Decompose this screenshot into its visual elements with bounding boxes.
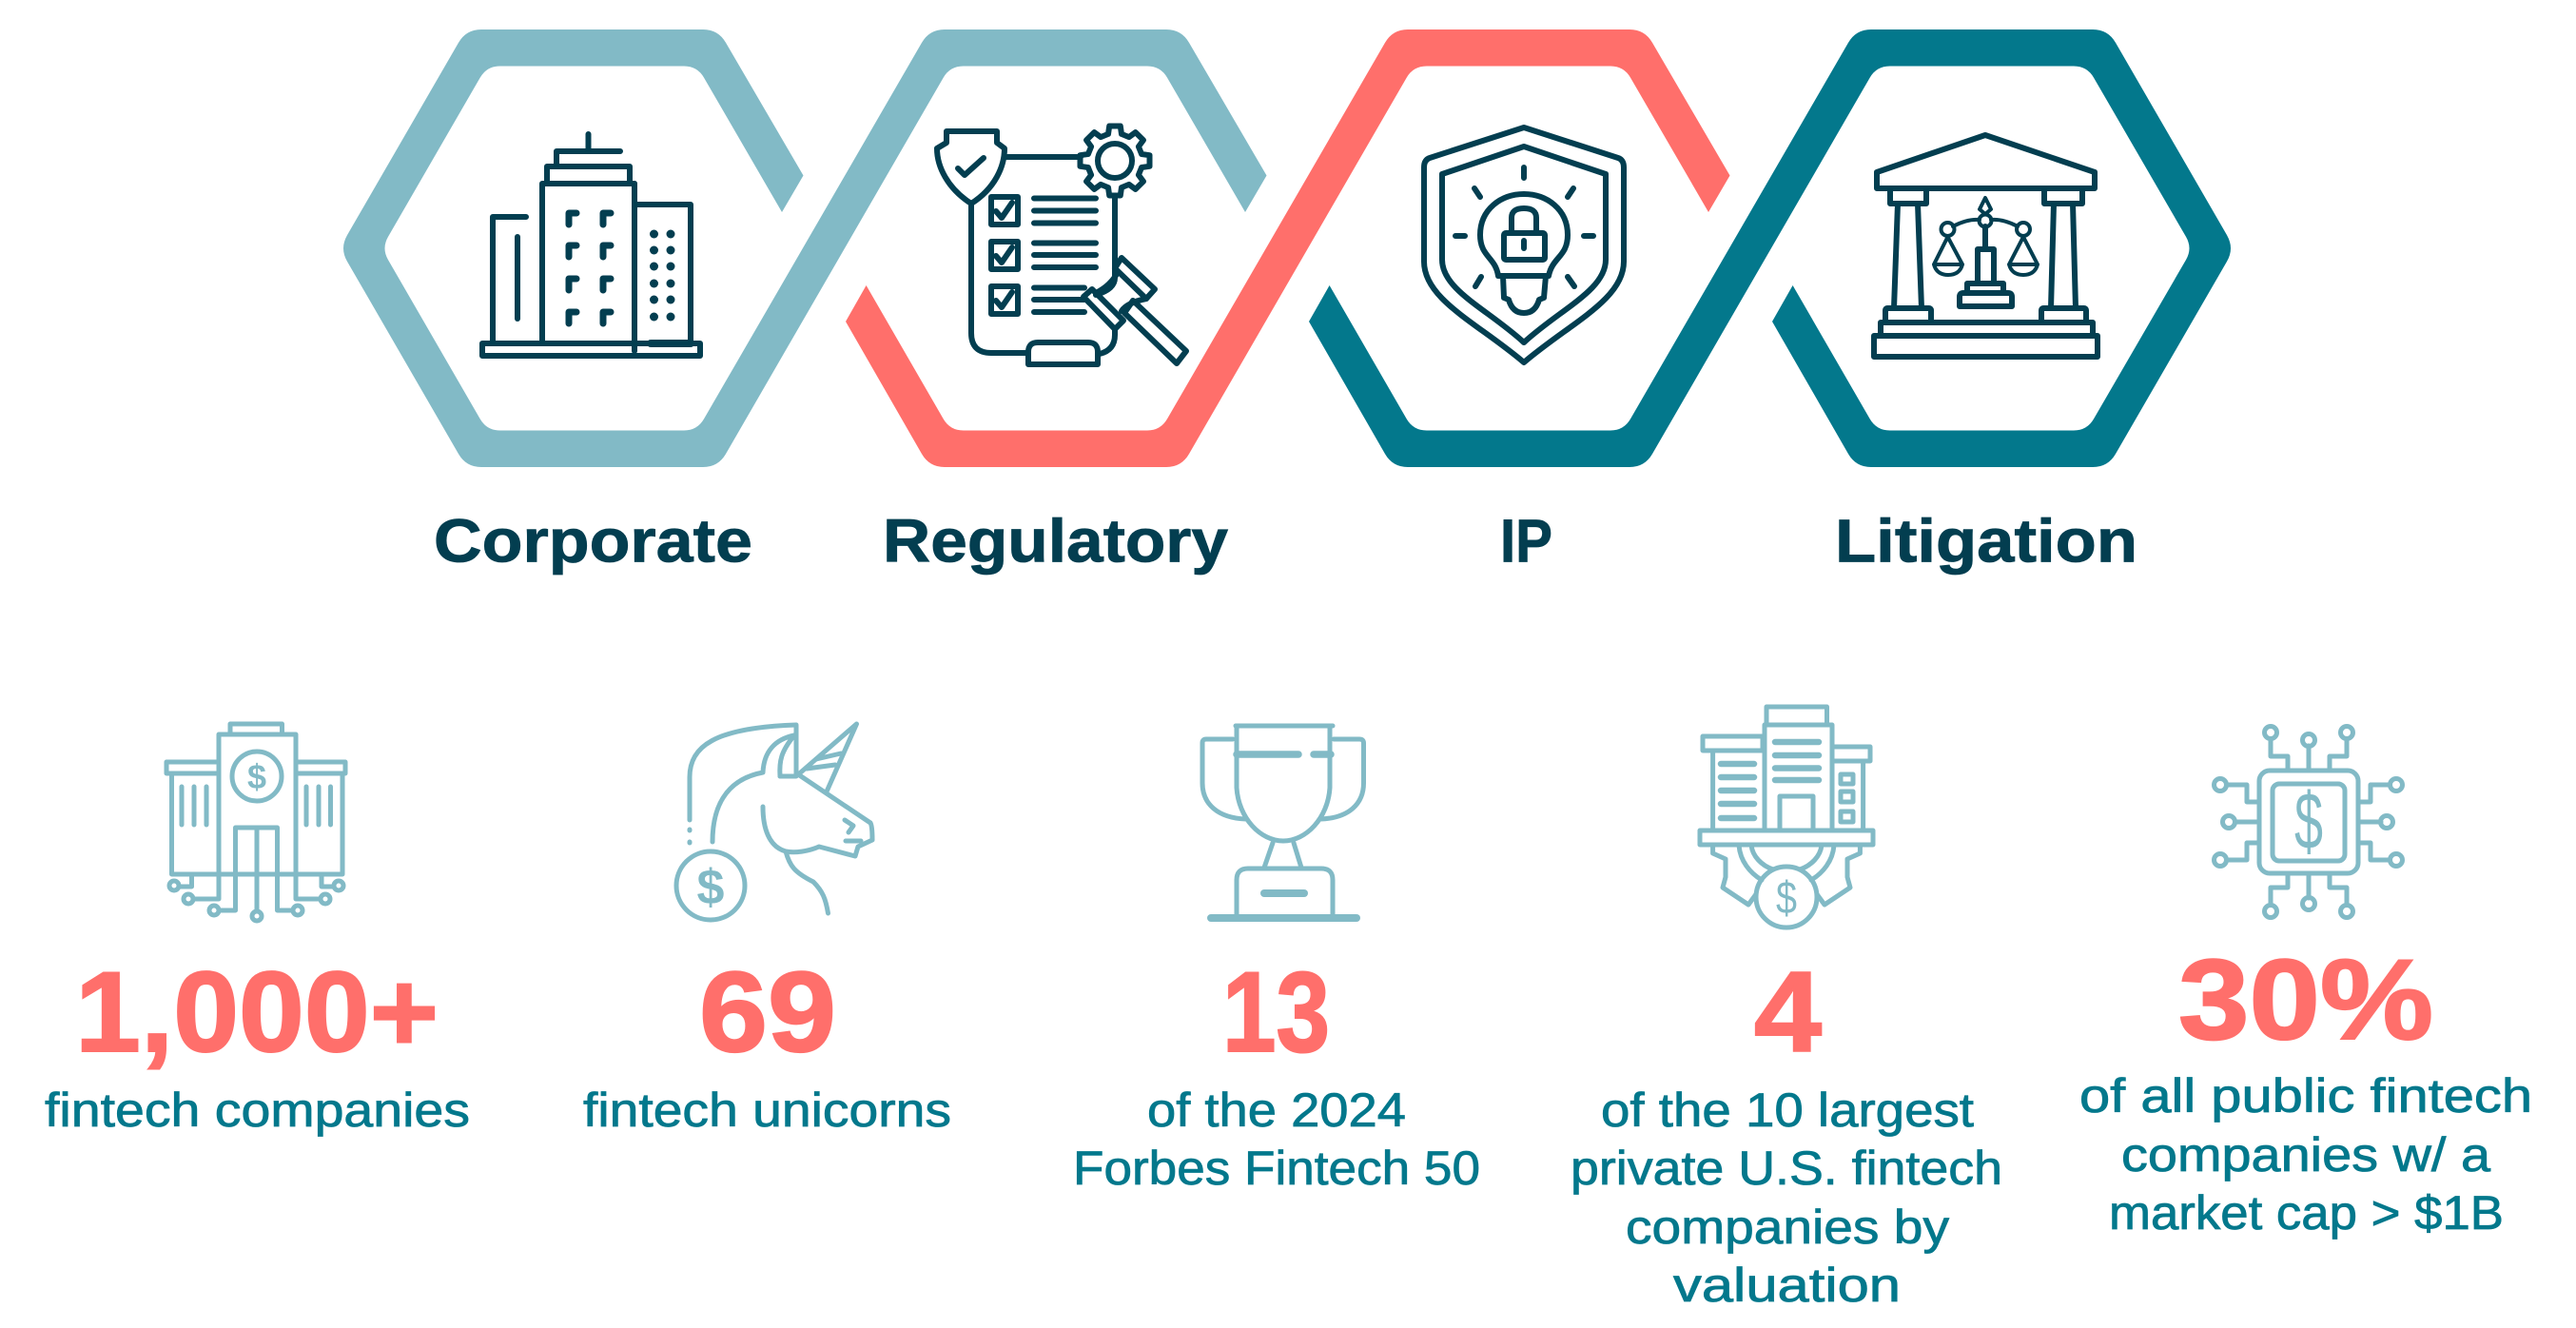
icon: trophy [1202,726,1364,918]
stat caption: of the 10 largest private U.S. fintech companies by valuation: private U.S. fintech [1571,1142,2002,1195]
stat caption: of all public fintech companies w/ a market cap > $1B [2079,1069,2532,1240]
stat number: 69: 69 [699,948,836,1076]
stat caption: of the 10 largest private U.S. fintech companies by valuation [1571,1084,2002,1312]
stat caption: fintech companies: fintech companies [45,1084,470,1137]
stat caption: of the 2024 Forbes Fintech 50 [1073,1084,1480,1195]
stat number: 4: 4 [1754,948,1822,1076]
dollar sign: $ [247,757,266,796]
label: Regulatory: Regulatory [883,506,1228,575]
stat number: 30%: 30% [2178,936,2433,1064]
dollar sign: $ [1776,873,1797,924]
stat caption: of the 10 largest private U.S. fintech companies by valuation: of the 10 largest [1601,1084,1974,1137]
label: Litigation: Litigation [1835,506,2137,575]
stat caption: of all public fintech companies w/ a market cap > $1B: of all public fintech [2079,1069,2532,1123]
hexagon ribbon: dark teal (IP and Litigation) [1309,29,2231,467]
hexagon ribbon: light blue (Corporate and Regulatory) [343,29,1267,467]
stat caption: of all public fintech companies w/ a market cap > $1B: market cap > $1B [2109,1186,2504,1240]
stat caption: of the 2024 Forbes Fintech 50: Forbes Fintech 50 [1073,1142,1480,1195]
icon: regulatory checklist with shield, gear and gavel [937,126,1186,364]
stat caption: of the 10 largest private U.S. fintech companies by valuation: valuation [1673,1259,1901,1312]
dollar sign: $ [697,860,725,915]
stat caption: of all public fintech companies w/ a market cap > $1B: companies w/ a [2121,1128,2490,1182]
dollar sign: $ [2294,776,2323,866]
hexagon ribbon: coral (Regulatory and IP) [846,29,1729,467]
stat caption: fintech unicorns: fintech unicorns [583,1084,951,1137]
icon: corporate office buildings [482,134,700,356]
stat caption: of the 2024 Forbes Fintech 50: of the 2024 [1147,1084,1406,1137]
stat number: 13: 13 [1222,948,1330,1076]
icon: shield with light bulb and padlock [1424,127,1624,362]
label: Corporate: Corporate [434,506,752,575]
icon: unicorn with dollar coin [676,724,872,920]
icon: dollar microchip [2215,727,2403,917]
icon: fintech buildings with dollar coin [1700,707,1873,928]
icon: courthouse with scales of justice [1874,135,2098,357]
icon: bank building with circuit lines [166,724,345,921]
label: IP: IP [1500,506,1552,575]
stat number: 1,000+: 1,000+ [75,948,439,1076]
stat caption: of the 10 largest private U.S. fintech companies by valuation: companies by [1626,1201,1949,1254]
